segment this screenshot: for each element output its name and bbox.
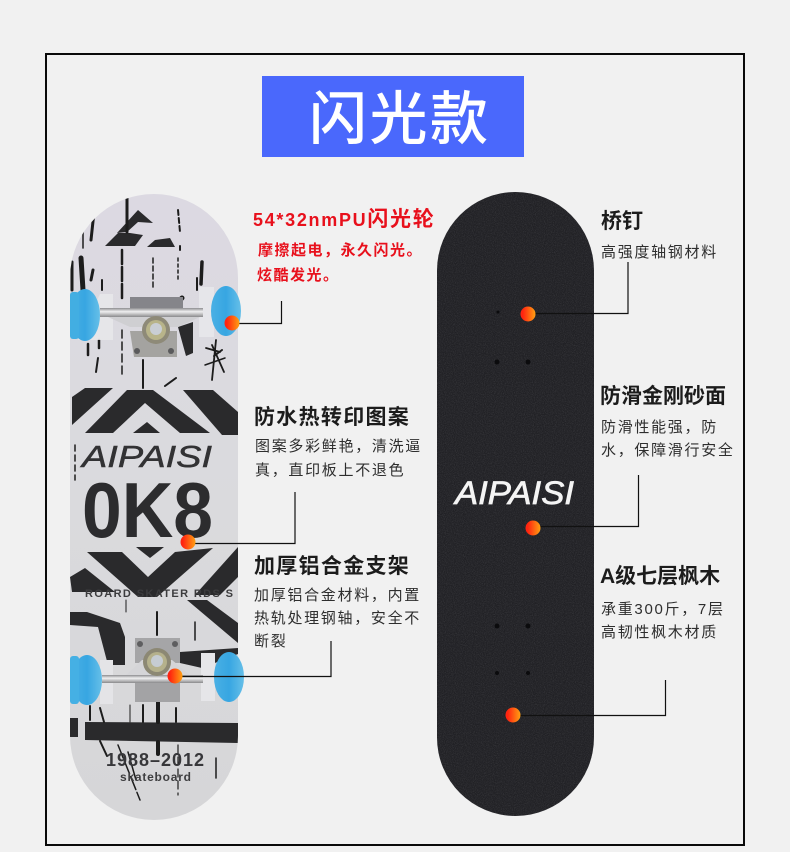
callout: PU flash wheel (224, 208, 435, 330)
grip texture (437, 192, 594, 816)
callout: waterproof print: 图案多彩鲜艳，清洗逼 (255, 437, 422, 455)
callout: truck bolts: 桥钉 (601, 210, 643, 233)
callout: waterproof print: 真，直印板上不退色 (255, 461, 405, 479)
deck body (70, 194, 238, 820)
deck artwork: ROARD SKATER RDS S (85, 588, 233, 600)
skateboard: grip tape top (437, 192, 594, 816)
callout: aluminium truck: 加厚铝合金支架 (254, 554, 410, 578)
callout: seven-ply maple: 承重300斤，7层 (601, 601, 725, 618)
callout: seven-ply maple: A级七层枫木 (600, 565, 720, 588)
callout: aluminium truck: 加厚铝合金材料，内置 (254, 587, 421, 604)
callout: truck bolts (520, 210, 718, 322)
bottom truck and wheels (70, 638, 244, 705)
grip logo: AIPAISI (453, 475, 574, 511)
callout: PU flash wheel: 54*32nmPU闪光轮 (253, 208, 435, 231)
callout: anti-slip grip: 水，保障滑行安全 (601, 441, 735, 459)
paint streaks (72, 197, 225, 800)
deck artwork: skateboard (120, 770, 191, 784)
mounting holes (494, 310, 530, 675)
title banner: 闪光款 (309, 87, 488, 152)
top truck and wheels (70, 286, 241, 357)
deck artwork (70, 197, 238, 800)
skateboard: printed deck underside (70, 194, 244, 820)
callout: anti-slip grip (526, 384, 735, 536)
deck artwork: 0K8 (82, 466, 213, 554)
callout: seven-ply maple (506, 565, 725, 722)
callout: PU flash wheel: 炫酷发光。 (257, 266, 340, 284)
callout: aluminium truck: 热轨处理钢轴，安全不 (254, 609, 421, 627)
callout: PU flash wheel: 摩擦起电，永久闪光。 (258, 241, 423, 259)
callout: anti-slip grip: 防滑性能强，防 (601, 419, 718, 436)
deck lettering: AIPAISI (80, 439, 212, 474)
callout: waterproof print: 防水热转印图案 (254, 406, 410, 429)
callout: anti-slip grip: 防滑金刚砂面 (600, 384, 726, 408)
callout: waterproof print (180, 406, 422, 550)
callout: aluminium truck: 断裂 (254, 633, 287, 650)
callout: truck bolts: 高强度轴钢材料 (601, 244, 718, 261)
deck artwork: 1988–2012 (106, 750, 204, 770)
callout: seven-ply maple: 高韧性枫木材质 (601, 624, 718, 641)
title banner (262, 76, 524, 157)
callout: aluminium truck (168, 554, 421, 684)
grip body (437, 192, 594, 816)
